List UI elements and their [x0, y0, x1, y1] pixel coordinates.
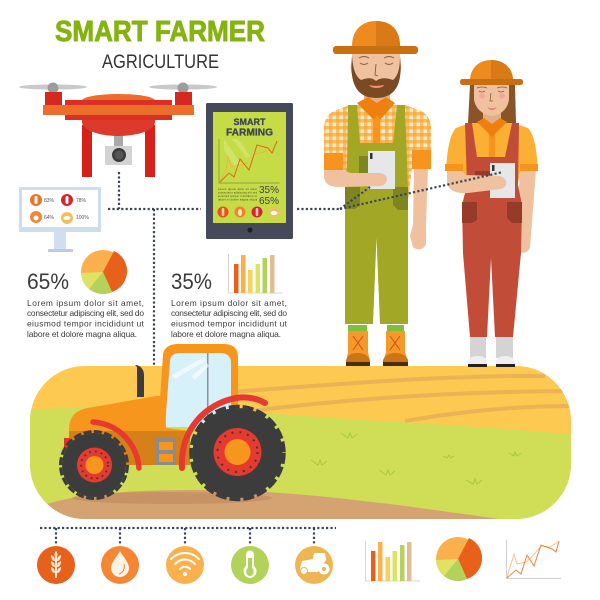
tablet: labore et dolore magna aliqua — [218, 198, 258, 202]
hood — [69, 396, 190, 465]
left forearm and hand — [324, 170, 387, 187]
bar chart: 35% — [228, 254, 283, 293]
right arm — [410, 168, 428, 249]
paragraph: 65%: eiusmod tempor incididunt ut — [27, 318, 145, 328]
connector overlay on farmers — [340, 172, 503, 209]
shoes — [470, 337, 513, 358]
bottom bar chart — [366, 541, 420, 581]
tractor — [60, 344, 284, 500]
bottom pie chart — [436, 537, 482, 581]
monitor: 78% — [76, 198, 87, 204]
collar — [489, 128, 495, 157]
tablet: eiusmod tempor incididunt ut — [218, 195, 257, 198]
neck — [364, 85, 390, 112]
hat — [352, 21, 400, 46]
field — [30, 366, 575, 525]
grille — [156, 438, 176, 465]
paragraph: 35%: Lorem ipsum dolor sit amet, — [171, 298, 287, 308]
title: SMART FARMER — [55, 16, 265, 48]
paragraph: 35%: eiusmod tempor incididunt ut — [171, 318, 288, 328]
icon: wheat — [37, 546, 75, 584]
stat: 65%: 65% — [27, 269, 69, 294]
tablet: FARMING — [226, 128, 273, 138]
paragraph: 35%: labore et dolore magna aliqua. — [171, 329, 281, 339]
shirt — [324, 105, 431, 200]
head — [350, 54, 401, 98]
phone — [490, 163, 515, 198]
beard — [351, 56, 401, 98]
left forearm and hand — [447, 171, 506, 193]
stat: 65% — [27, 250, 145, 339]
hat — [470, 60, 513, 79]
right arm — [516, 170, 536, 253]
monitor: 83% — [44, 198, 55, 204]
hair — [468, 85, 516, 123]
paragraph: 65%: labore et dolore magna aliqua. — [27, 329, 137, 339]
monitor — [19, 187, 101, 252]
bottom line chart — [506, 540, 561, 578]
icon: water drop — [101, 546, 139, 584]
icon: wifi — [166, 546, 204, 584]
grass tufts — [311, 433, 521, 484]
front fender — [93, 422, 139, 468]
monitor: 64% — [44, 215, 55, 221]
sleeve cuffs — [324, 150, 431, 170]
pie chart: 65% — [81, 250, 127, 294]
farmer: man — [324, 21, 431, 366]
sleeve cuffs — [445, 164, 538, 171]
tablet: 35% — [259, 184, 279, 196]
connector lines — [40, 172, 340, 545]
phone — [368, 151, 395, 189]
subtitle: AGRICULTURE — [102, 52, 219, 73]
head — [474, 85, 509, 116]
icon: tractor — [295, 546, 333, 584]
overalls — [462, 123, 522, 337]
cab — [158, 344, 238, 428]
front wheel — [60, 432, 128, 498]
stat: 35%: 35% — [171, 269, 212, 294]
neck — [483, 110, 501, 135]
tablet: 65% — [259, 195, 279, 207]
farmer: woman — [445, 60, 538, 367]
paragraph: 65%: Lorem ipsum dolor sit amet, — [27, 298, 144, 308]
paragraph: 35% — [171, 298, 288, 339]
legs and boots — [348, 325, 367, 332]
rear wheel — [191, 406, 284, 500]
shirt — [446, 123, 538, 190]
tablet: consectetur adipiscing elit sed — [218, 192, 258, 194]
exhaust — [135, 365, 144, 397]
paragraph: 35%: consectetur adipiscing elit, sed do — [171, 308, 287, 318]
tablet: SMART — [234, 117, 266, 127]
drone — [19, 82, 217, 177]
paragraph: 65% — [27, 298, 145, 339]
monitor: 100% — [76, 215, 89, 221]
tablet: Lorem ipsum dolor sit amet — [218, 188, 257, 191]
shirt placket and collar — [373, 112, 380, 143]
rear fender — [182, 397, 265, 468]
tablet — [206, 103, 293, 239]
stat: 35% — [171, 254, 288, 339]
paragraph: 65%: consectetur adipiscing elit, sed do — [27, 308, 144, 318]
overalls — [345, 105, 408, 324]
icon: thermometer — [231, 546, 269, 584]
